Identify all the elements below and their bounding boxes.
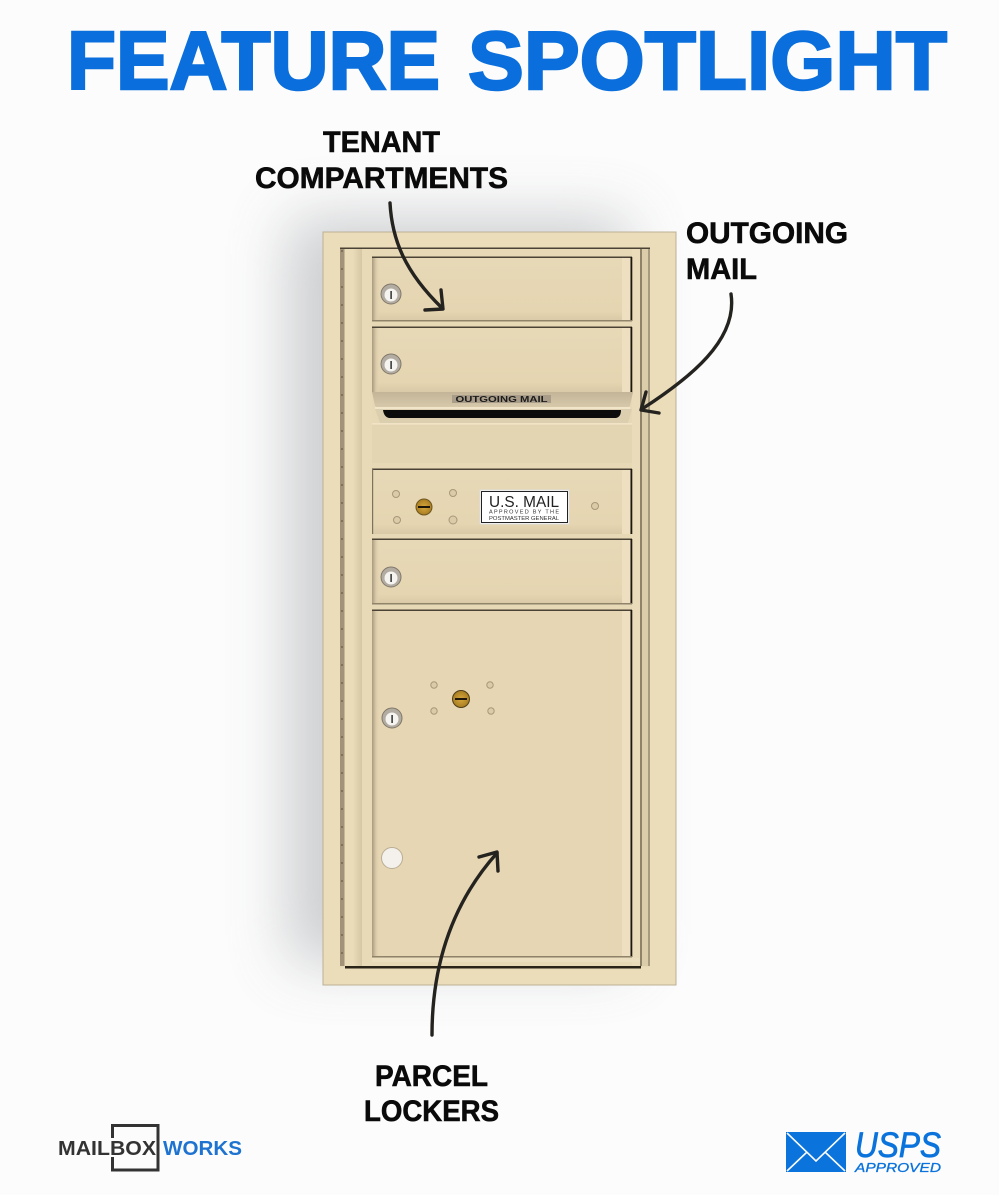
inner recess xyxy=(340,248,650,968)
title: FEATURE xyxy=(67,14,440,107)
U.S. Mail plate: APPROVED BY THE xyxy=(489,510,559,516)
logo: Mailbox Works: MAILBOX xyxy=(58,1138,157,1160)
white button xyxy=(382,848,402,868)
logo: USPS Approved: APPROVED xyxy=(854,1160,941,1175)
label: parcel lockers: PARCEL xyxy=(375,1060,488,1093)
title xyxy=(67,14,947,107)
label: outgoing mail: MAIL xyxy=(686,253,757,286)
brass lock xyxy=(452,690,470,708)
U.S. Mail plate xyxy=(480,490,569,524)
label: tenant compartments: TENANT xyxy=(323,126,440,159)
title: SPOTLIGHT xyxy=(468,14,947,107)
U.S. Mail plate: U.S. MAIL xyxy=(489,494,559,511)
door: tenant compartment 1 xyxy=(372,256,632,322)
arrow: outgoing mail xyxy=(641,294,732,413)
logo: USPS Approved: USPS xyxy=(855,1126,941,1165)
icon: envelope xyxy=(786,1132,846,1172)
door: tenant compartment 3 xyxy=(372,538,632,604)
key lock xyxy=(382,708,402,728)
label: parcel lockers xyxy=(364,1060,499,1128)
door: parcel locker xyxy=(372,610,640,962)
door: master access with U.S. Mail plate xyxy=(372,468,632,534)
label: parcel lockers: LOCKERS xyxy=(364,1095,499,1128)
logo: Mailbox Works xyxy=(58,1126,242,1170)
outer frame xyxy=(323,232,676,985)
label: tenant compartments: COMPARTMENTS xyxy=(255,162,508,195)
label: outgoing mail: OUTGOING xyxy=(686,217,848,250)
door: tenant compartment 2 xyxy=(372,326,632,392)
arrow: tenant compartments xyxy=(390,203,443,310)
mailbox unit xyxy=(288,218,676,985)
outgoing mail slot: OUTGOING MAIL xyxy=(456,395,548,404)
U.S. Mail plate: POSTMASTER GENERAL xyxy=(489,516,559,522)
label: outgoing mail xyxy=(686,217,848,286)
arrow: parcel lockers xyxy=(432,852,498,1035)
logo: Mailbox Works: WORKS xyxy=(163,1138,242,1160)
blank panel xyxy=(372,425,632,463)
logo: USPS Approved xyxy=(786,1126,941,1175)
label: tenant compartments xyxy=(255,126,508,195)
brass lock xyxy=(416,499,432,515)
outgoing mail slot xyxy=(372,392,633,424)
